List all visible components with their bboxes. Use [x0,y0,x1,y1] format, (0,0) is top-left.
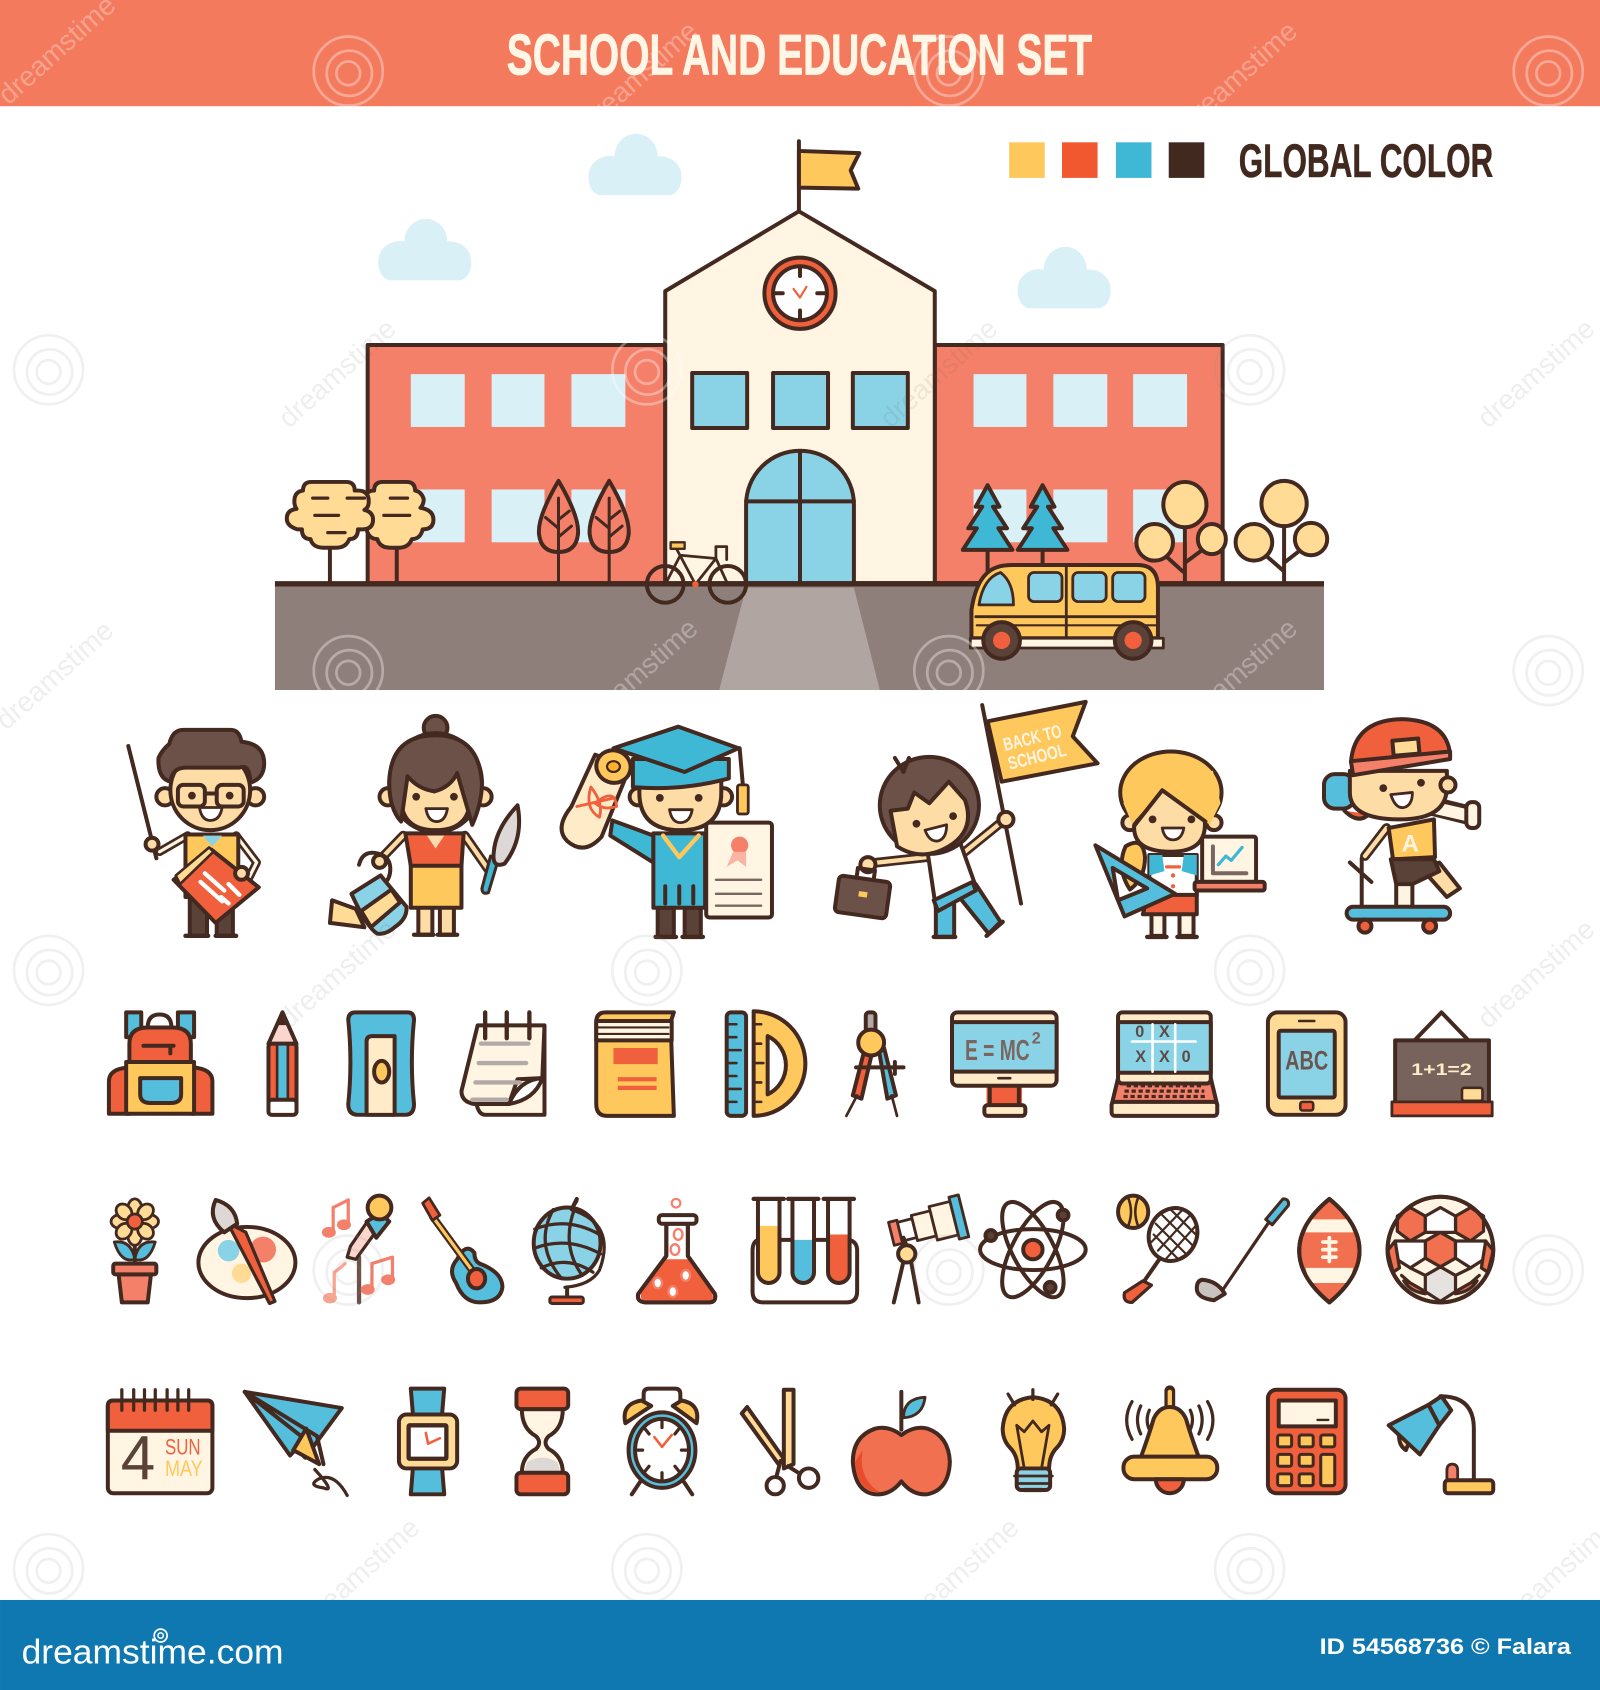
icon: laptop with tic-tac-toe: 0 [1135,1023,1144,1041]
character: boy with flag: SCHOOL [1006,739,1068,774]
clouds [378,134,1111,308]
icon: calendar: 4 [121,1423,155,1493]
icon: laptop with tic-tac-toe: X [1159,1048,1170,1066]
icon: guitar [423,1198,502,1302]
watermark text: dreamstime [1174,15,1303,136]
character: boy on skateboard: A [1402,832,1419,858]
footer bar [0,1600,1600,1690]
clock [764,258,836,329]
school building illustration [275,141,1327,690]
right wing [935,345,1223,583]
icon: calculator [1268,1390,1346,1493]
watermark text: dreamstime [1471,313,1600,434]
icon: globe [534,1199,604,1303]
icon: laptop with tic-tac-toe [1112,1012,1217,1116]
pine trees [963,485,1067,583]
icon: apple [853,1392,950,1494]
icon: wristwatch [399,1389,457,1494]
round trees [1136,481,1327,583]
icon: test tubes in rack [753,1199,857,1302]
character: girl with ruler and laptop [1095,751,1265,937]
legend: global color [1009,135,1493,188]
icon: calendar: SUN [165,1434,201,1459]
icon: monitor with formula: E = MC [965,1035,1030,1067]
watermark text: dreamstime [1471,913,1600,1034]
bicycle [647,542,746,603]
icon: drawing compass [846,1012,904,1116]
icon: chemistry flask [638,1199,715,1302]
character: graduate [562,727,772,937]
icon: laptop with tic-tac-toe: 0 [1182,1048,1191,1066]
character: boy on skateboard [1324,719,1479,933]
watermark text: dreamstime [874,313,1003,434]
watermark text: dreamstime [1174,612,1303,733]
character: boy with flag: BACK TO [1001,720,1064,755]
bushy trees [287,482,433,583]
icon: backpack [109,1012,212,1114]
icon: racket and ball [1118,1196,1206,1302]
icon: sharpener [348,1012,414,1115]
icon: laptop with tic-tac-toe: X [1159,1023,1170,1041]
icon: atom [980,1193,1086,1306]
icon: ringing bell [1123,1391,1217,1493]
watermark text: dreamstime [296,1512,425,1632]
icon row 1: school supplies [109,1011,1492,1116]
icon: ruler and protractor [727,1011,805,1116]
icon: light bulb [1003,1390,1064,1490]
icon: paper plane [245,1392,347,1495]
icon: scissors [742,1390,818,1494]
character: boy with flag [834,702,1098,937]
flag [799,141,859,211]
icon row 3: time and objects [108,1389,1493,1495]
road [275,583,1324,690]
icon: paint palette [198,1200,295,1303]
icon row 2: subjects and sports [111,1193,1493,1306]
icon: laptop with tic-tac-toe: X [1135,1048,1146,1066]
watermark text: dreamstime [574,612,704,733]
left wing [368,345,665,583]
school bus [970,565,1163,659]
icon: monitor with formula: 2 [1032,1030,1041,1048]
icon: blackboard [1392,1012,1492,1116]
footer logo: dreamstime.com [22,1634,284,1672]
icon: calendar: MAY [165,1456,203,1481]
icon: telescope [886,1195,969,1302]
watermark text: dreamstime [272,313,402,434]
icon: flower in pot [111,1199,159,1302]
icon: calendar [108,1390,212,1493]
icon: monitor with formula [952,1012,1057,1116]
icon: alarm clock [625,1389,697,1494]
icon: golf club [1197,1199,1289,1300]
icon: desk lamp [1389,1396,1493,1493]
character: female teacher [330,716,519,935]
title: SCHOOL AND EDUCATION SET [507,23,1092,87]
icon: tablet [1268,1012,1346,1115]
icon: notepad [461,1012,544,1115]
icon: tablet: ABC [1285,1046,1328,1076]
watermark text: dreamstime [272,913,402,1034]
icon: book [596,1012,674,1116]
central tower [665,211,935,583]
header banner [0,0,1600,106]
footer image id: ID 54568736 © Falara [1320,1634,1571,1659]
icon: soccer ball [1388,1197,1493,1302]
icon: blackboard: 1+1=2 [1411,1061,1472,1079]
door [746,451,854,583]
icon: american football [1299,1199,1360,1302]
watermark text: dreamstime [574,15,704,136]
leaf trees [539,481,629,583]
icon: hourglass [516,1389,568,1494]
icon: pencil [268,1012,297,1115]
watermark text: dreamstime [895,1512,1025,1632]
character: male teacher [128,730,264,936]
icon: microphone and notes [323,1196,394,1302]
